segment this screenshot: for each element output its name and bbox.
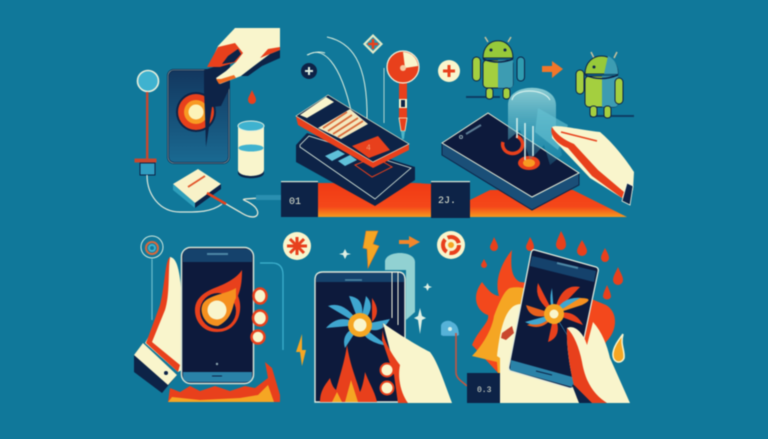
icon: multicolour swirl (525, 283, 589, 342)
icon: flames in phone (320, 345, 377, 402)
icon: translucent swipe arch (508, 88, 568, 165)
icon: microphone probe (384, 51, 419, 139)
icon: fingers (252, 288, 267, 344)
icon: phone upper shell (296, 95, 409, 168)
icon: flames under phone (168, 362, 280, 402)
icon: blue bulb (441, 321, 467, 386)
icon: asterisk badge (283, 232, 311, 260)
icon: target pin (141, 236, 163, 320)
icon: lightning bolt small (296, 334, 306, 366)
icon: glass of water (238, 121, 264, 178)
icon: orange arrow (542, 61, 563, 78)
panel: step 5 swirl phone (296, 231, 465, 403)
icon: hand (207, 28, 280, 84)
label: 0.3 box: 0.3 (477, 386, 492, 395)
label: 0.3 box (467, 373, 500, 403)
icon: android robot left (466, 37, 524, 99)
icon: shirt cuff (134, 343, 177, 393)
icon: sparkle small (423, 283, 432, 291)
icon: phone with glowing circle (168, 70, 229, 163)
icon: diamond plus (363, 34, 383, 54)
panel: step 2 disassembled phone (296, 34, 419, 206)
icon: hand behind phone (145, 257, 182, 372)
icon: tilted phone with swirl (509, 250, 598, 388)
label: 2J (431, 181, 470, 218)
icon: flame droplets (481, 231, 623, 299)
icon: phone base tray (296, 133, 415, 206)
panel: step 3 android and tapping hand (420, 37, 634, 218)
icon: ground flame strip (317, 183, 432, 217)
icon: water droplet (248, 90, 256, 104)
icon: glass arch (385, 253, 415, 320)
icon: red thumb tip (501, 326, 514, 340)
icon: phone with swirl (315, 272, 405, 402)
icon: swirl badge (437, 231, 465, 259)
panel: step 4 phone held in hand with flame (134, 232, 311, 402)
icon: dark lightning shadow (204, 62, 230, 147)
icon: ground flame wedge (420, 183, 627, 217)
icon: power adapter box (173, 169, 221, 208)
icon: sparkle (339, 249, 351, 259)
label: 2J: 2J. (438, 196, 456, 207)
icon: hand holding tilted phone (567, 322, 630, 403)
icon: hand on phone (551, 126, 634, 205)
icon: charging cable (147, 175, 222, 212)
icon: big flames (472, 250, 615, 390)
panel: step 1 phone and charger (134, 28, 432, 217)
icon: phone upright with flame (182, 248, 254, 384)
label: 01: 01 (289, 197, 301, 208)
icon: bracket glow (260, 263, 283, 350)
icon: plus circle (438, 60, 460, 82)
icon: arrow (399, 236, 420, 248)
icon: cream glow (497, 304, 585, 403)
icon: orange teardrop (613, 334, 624, 362)
icon: lamp probe (134, 70, 158, 175)
icon: flame swirl (195, 270, 242, 332)
icon: hand holding phone (380, 323, 452, 403)
icon: phone upper shell: 4 (366, 144, 371, 153)
icon: red cable (207, 193, 274, 217)
icon: android robot right (576, 52, 634, 118)
icon: plus badge (301, 63, 317, 79)
icon: lightning bolt large (363, 231, 379, 268)
icon: blue swirl (326, 296, 390, 348)
icon: sparkle tall (414, 308, 426, 334)
panel: step 6 phone in flames (441, 231, 630, 403)
icon: motion curves (307, 37, 367, 120)
icon: phone lying flat (442, 113, 579, 210)
label: 01 (281, 181, 318, 217)
